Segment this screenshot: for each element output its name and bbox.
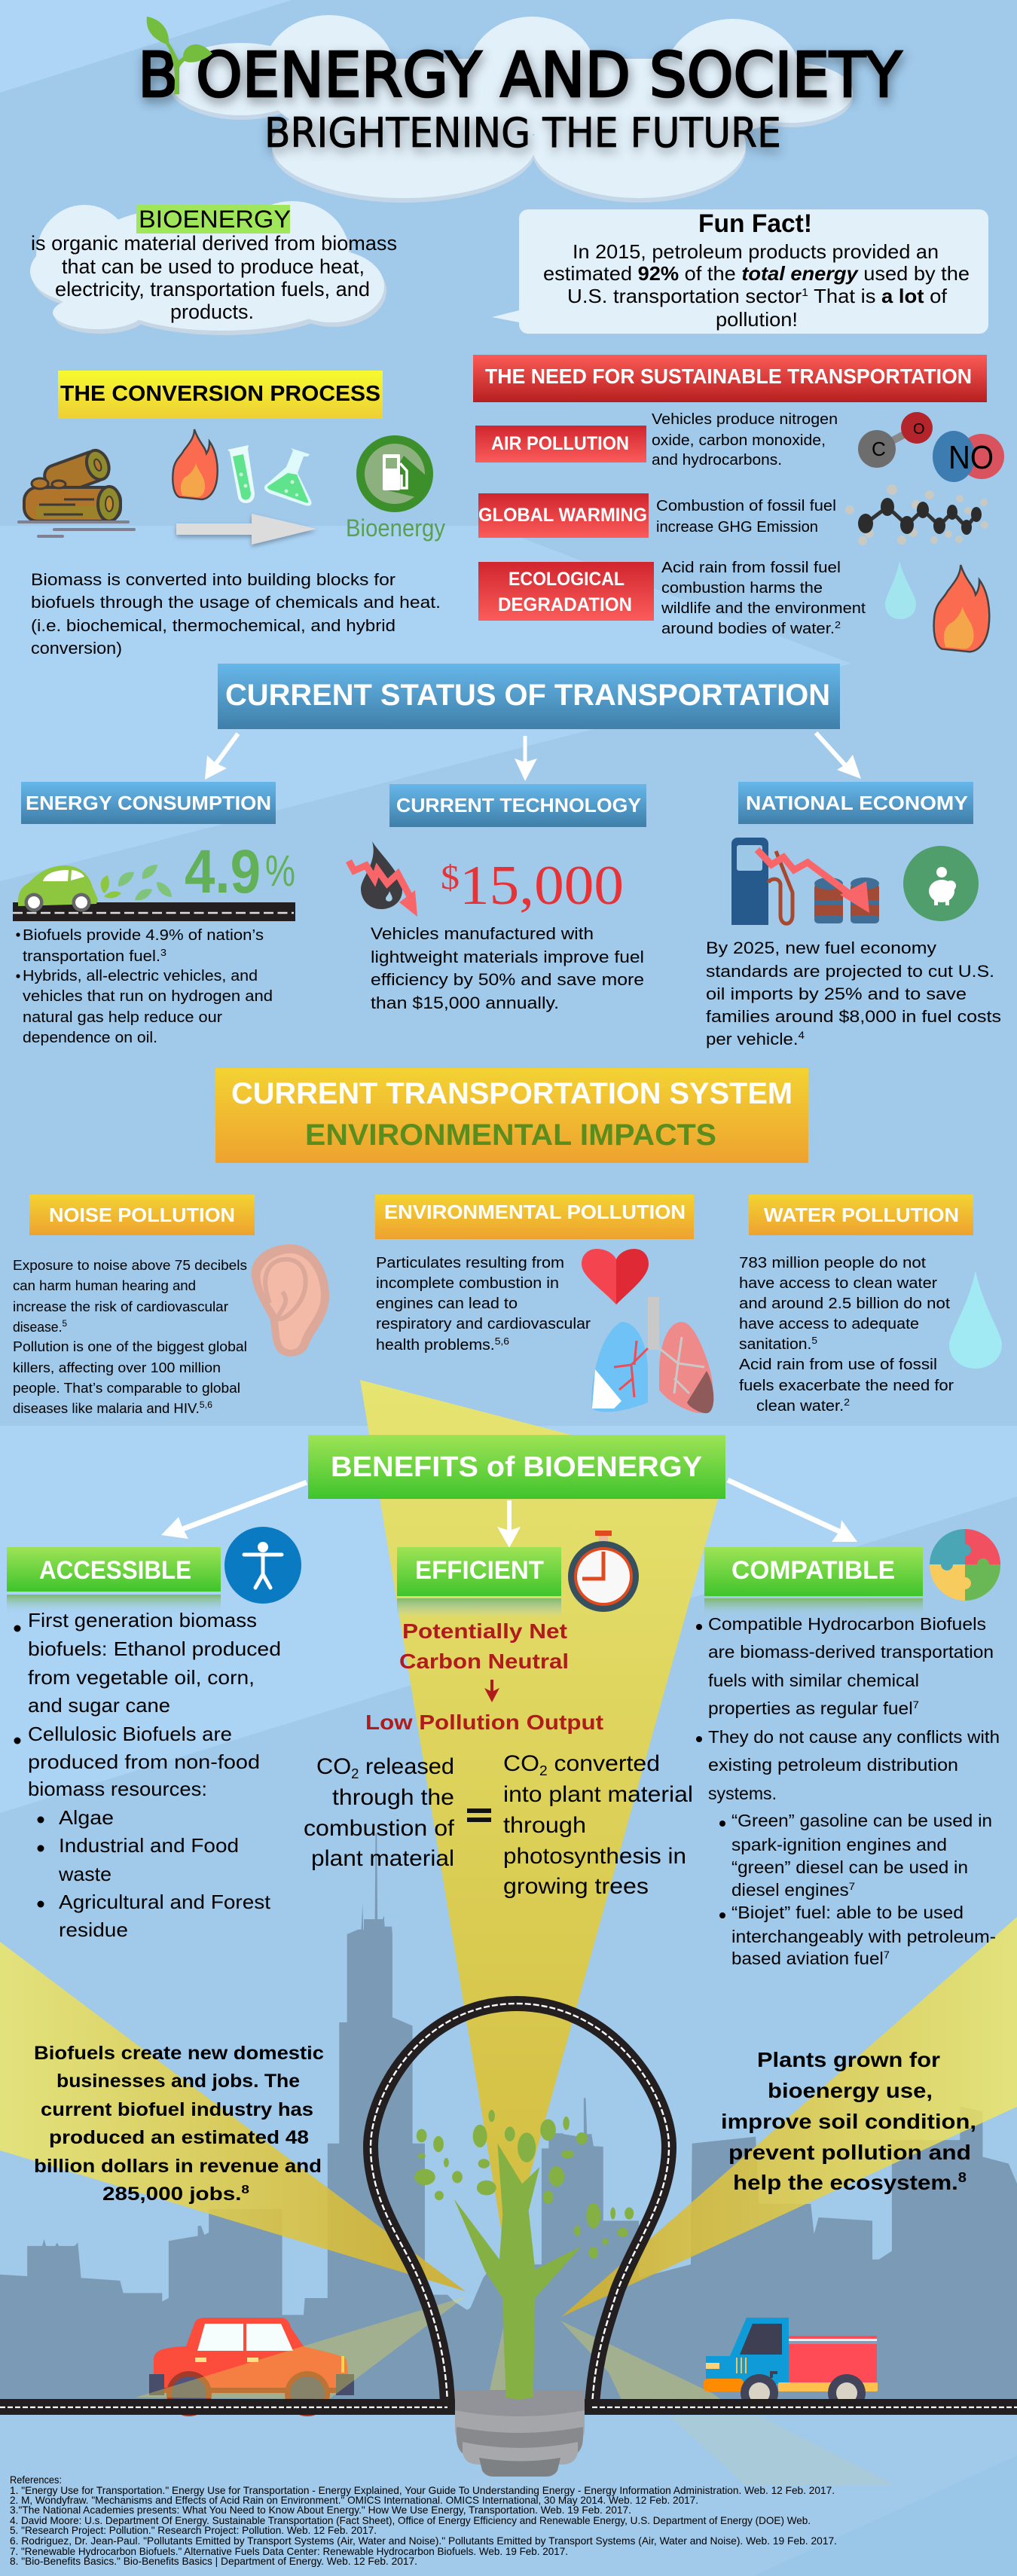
- icon: stopwatch: [568, 1531, 639, 1612]
- label: ecological degradation: DEGRADATION: [498, 594, 632, 615]
- description: 783 million people do not: [739, 1255, 926, 1271]
- icon: red car: [149, 2318, 354, 2416]
- panel: current status of transportation: [13, 664, 1001, 1048]
- description: incomplete combustion in: [376, 1275, 559, 1292]
- definition text: that can be used to produce heat,: [62, 255, 365, 278]
- CO2 converted text: 2: [539, 1763, 548, 1778]
- compatibility list: existing petroleum distribution: [708, 1755, 958, 1775]
- heading: CURRENT STATUS OF TRANSPORTATION: [225, 679, 830, 712]
- ecological degradation text: Acid rain from fossil fuel: [661, 560, 841, 576]
- benefits list: Industrial and Food: [59, 1834, 239, 1857]
- ecological degradation text: wildlife and the environment: [661, 600, 866, 617]
- references: 6. Rodriguez, Dr. Jean-Paul. "Pollutants Emitted by Transport Systems (Air, Water and Noise)." Pollutants Emitted by Transport Systems (Air, Water and Noise). Web. 19 Feb. 2017.: [10, 2535, 837, 2547]
- compatibility list: Compatible Hydrocarbon Biofuels: [708, 1614, 986, 1634]
- description: sanitation.: [739, 1336, 808, 1353]
- text: biofuels create jobs: businesses and jobs. The: [56, 2071, 300, 2092]
- description: oil imports by 25% and to save: [706, 984, 967, 1003]
- description: [371, 924, 644, 1012]
- heading: COMPATIBLE: [731, 1556, 895, 1585]
- heading: NATIONAL ECONOMY: [746, 792, 968, 814]
- conversion description: conversion): [31, 639, 122, 658]
- compatibility list: 7: [884, 1949, 890, 1961]
- text: plants grown for bioenergy: prevent pollution and: [728, 2141, 971, 2164]
- icon: road: [13, 902, 295, 921]
- compatibility list: 7: [849, 1880, 855, 1892]
- definition text: [31, 232, 397, 323]
- CO2 converted text: CO: [503, 1751, 537, 1776]
- icon: CO and NO molecules: NO: [948, 439, 994, 476]
- icon: puzzle: [930, 1529, 1000, 1601]
- bullet text: Biofuels provide 4.9% of nation’s: [23, 927, 264, 944]
- heading: ENERGY CONSUMPTION: [26, 792, 271, 814]
- panel: fun fact: [492, 209, 988, 334]
- column: efficient: [304, 1531, 693, 1899]
- air pollution text: and hydrocarbons.: [652, 452, 782, 469]
- description: [13, 1258, 247, 1416]
- text: biofuels create jobs: produced an estimated 48: [49, 2127, 309, 2148]
- description: lightweight materials improve fuel: [371, 948, 644, 966]
- text: plants grown for bioenergy: Plants grown for: [757, 2048, 940, 2071]
- heading: THE CONVERSION PROCESS: [60, 382, 380, 406]
- fun fact text: That is: [808, 285, 881, 307]
- stat: 4.9%: %: [265, 847, 295, 896]
- carbon neutral text: Potentially Net: [402, 1619, 567, 1643]
- ecological degradation text: around bodies of water.: [661, 621, 818, 637]
- text: biofuels create jobs: 285,000 jobs.: [102, 2184, 220, 2205]
- description: disease.: [13, 1320, 63, 1335]
- arrow: conversion: [176, 514, 316, 545]
- compatibility list: based aviation fuel: [731, 1949, 876, 1968]
- heading: WATER POLLUTION: [764, 1204, 959, 1226]
- bulb-shaped road: [371, 2004, 669, 2405]
- label: air pollution: AIR POLLUTION: [491, 433, 629, 454]
- fun fact text: 1: [802, 286, 808, 299]
- panel: benefits of bioenergy: [7, 1435, 1000, 1968]
- text: biofuels create jobs: [34, 2043, 324, 2205]
- heading: [704, 1547, 923, 1617]
- icon: test tube: [228, 445, 255, 503]
- label: global warming: [478, 493, 649, 538]
- compatibility list: fuels with similar chemical: [708, 1671, 919, 1690]
- CO2 released text: CO: [316, 1754, 350, 1779]
- heading: [473, 355, 987, 402]
- heading: [749, 1195, 973, 1235]
- bullet text: [16, 927, 273, 1046]
- CO2 released text: 2: [351, 1766, 359, 1781]
- references: 7. "Renewable Hydrocarbon Biofuels." Alternative Fuels Data Center: Renewable Hydrocarbon Biofuels. Web. 19 Feb. 2017.: [10, 2545, 568, 2557]
- light beam: lower headlights: [136, 2297, 722, 2400]
- description: [706, 939, 1001, 1048]
- references: 4. David Moore: U.s. Department Of Energy. Sustainable Transportation (Fact Sheet), Office of Energy Efficiency and Renewable Energy, U.S. Department of Energy (DOE) Web.: [10, 2514, 811, 2526]
- compatibility list: They do not cause any conflicts with: [708, 1727, 1000, 1747]
- title: [138, 17, 902, 157]
- text: biofuels create jobs: Biofuels create new domestic: [34, 2043, 324, 2064]
- description: [739, 1255, 954, 1415]
- conversion description: [31, 570, 441, 658]
- icon: ear: [252, 1244, 329, 1357]
- global warming text: increase GHG Emission: [656, 519, 818, 536]
- column: noise pollution: [13, 1195, 329, 1416]
- icon: flask: [264, 448, 311, 505]
- bullet text: 3: [160, 947, 166, 958]
- equals sign: [467, 1808, 491, 1822]
- description: [376, 1255, 591, 1354]
- compatibility list: diesel engines: [731, 1880, 842, 1900]
- stat: 4.9%: 4.9: [185, 838, 261, 906]
- benefits list: and sugar cane: [28, 1694, 170, 1717]
- compatibility list: “green” diesel can be used in: [731, 1857, 968, 1877]
- arrow: to accessible: [161, 1482, 307, 1539]
- description: people. That’s comparable to global: [13, 1381, 240, 1396]
- heading: EFFICIENT: [415, 1556, 544, 1585]
- definition text: products.: [170, 301, 254, 323]
- heading: CURRENT TRANSPORTATION SYSTEM: [231, 1077, 793, 1110]
- icon: logs: [17, 447, 136, 538]
- description: have access to adequate: [739, 1316, 919, 1332]
- CO2 converted text: into plant material: [503, 1782, 693, 1807]
- title cloud: [168, 15, 853, 203]
- heading: [218, 664, 840, 729]
- description: engines can lead to: [376, 1296, 518, 1312]
- heading label: BIOENERGY: [139, 206, 291, 233]
- light beams from the bulb: [0, 1380, 1017, 2317]
- text: plants grown for bioenergy: improve soil condition,: [721, 2110, 976, 2133]
- references: [10, 2474, 837, 2567]
- bioenergy label: Bioenergy: [346, 514, 445, 542]
- CO2 converted text: through: [503, 1813, 586, 1838]
- definition text: electricity, transportation fuels, and: [55, 278, 370, 301]
- ecological degradation text: combustion harms the: [661, 580, 823, 597]
- fun fact text: a lot of: [881, 285, 945, 307]
- description: diseases like malaria and HIV.: [13, 1401, 194, 1416]
- arrow: to efficient: [497, 1500, 521, 1548]
- heading: [21, 782, 276, 824]
- icon: sprout: [147, 17, 212, 94]
- CO2 released text: plant material: [311, 1846, 454, 1871]
- description: killers, affecting over 100 million: [13, 1360, 221, 1375]
- skyline: [0, 1833, 1017, 2402]
- description: have access to clean water: [739, 1275, 937, 1292]
- icon: water drop: [885, 561, 916, 619]
- horizontal road: [0, 2399, 1017, 2415]
- description: 4: [799, 1029, 805, 1041]
- bullet text: transportation fuel.: [23, 948, 148, 965]
- heading: THE NEED FOR SUSTAINABLE TRANSPORTATION: [485, 365, 972, 388]
- text: plants grown for bioenergy: help the ecosystem.: [733, 2171, 935, 2194]
- CO2 released text: combustion of: [304, 1816, 455, 1841]
- references: 3."The National Academies presents: What You Need to Know About Energy." How We Use Energy, Transportation. Web. 19 Feb. 2017.: [10, 2504, 631, 2516]
- stat: $15,000: 15,000: [460, 855, 624, 917]
- CO2 converted text: growing trees: [503, 1874, 649, 1899]
- icon: delivery truck: [704, 2318, 878, 2412]
- description: 5: [62, 1318, 67, 1329]
- air pollution text: oxide, carbon monoxide,: [652, 432, 826, 449]
- column: national economy: [706, 782, 1001, 1048]
- references: 1. "Energy Use for Transportation." Energy Use for Transportation - Energy Explained, Your Guide To Understanding Energy - Energy Information Administration. Web. 12 Feb. 2017.: [10, 2484, 835, 2496]
- benefits list: from vegetable oil, corn,: [28, 1666, 255, 1689]
- icon: fuel pump and barrels: [731, 838, 879, 925]
- benefits list: First generation biomass: [28, 1609, 257, 1631]
- compatibility list: systems.: [708, 1784, 777, 1803]
- description: increase the risk of cardiovascular: [13, 1299, 228, 1314]
- fun fact text: pollution!: [716, 308, 798, 331]
- description: efficiency by 50% and save more: [371, 970, 644, 989]
- fun fact text: [543, 240, 970, 331]
- CO2 converted text: [503, 1751, 693, 1899]
- description: 2: [844, 1396, 850, 1408]
- conversion description: Biomass is converted into building blocks for: [31, 570, 396, 589]
- references: 8. "Bio-Benefits Basics." Bio-Benefits Basics | Department of Energy. Web. 12 Feb. 2017.: [10, 2555, 417, 2567]
- compatibility list: are biomass-derived transportation: [708, 1642, 994, 1662]
- heading: [397, 1547, 561, 1617]
- description: can harm human hearing and: [13, 1278, 196, 1293]
- icon: bioenergy pump badge: [356, 435, 433, 512]
- heading: [215, 1068, 808, 1163]
- CO2 converted text: photosynthesis in: [503, 1844, 686, 1869]
- label: ecological degradation: [478, 562, 654, 621]
- arrow: to energy consumption: [205, 734, 238, 780]
- icon: lungs: [591, 1297, 713, 1413]
- CO2 converted text: converted: [548, 1751, 660, 1776]
- heading: ENVIRONMENTAL IMPACTS: [305, 1119, 716, 1152]
- CO2 released text: through the: [332, 1785, 454, 1810]
- heading: [58, 371, 383, 419]
- panel: the conversion process: [17, 371, 445, 658]
- description: than $15,000 annually.: [371, 993, 559, 1012]
- arrow: to current technology: [515, 736, 537, 781]
- stat: $15,000: $: [441, 858, 460, 896]
- heading: [7, 1547, 221, 1613]
- benefits list: biofuels: Ethanol produced: [28, 1637, 281, 1660]
- fun fact text: In 2015, petroleum products provided an: [573, 240, 939, 263]
- arrow: to national economy: [816, 733, 861, 779]
- carbon neutral text: [365, 1619, 603, 1734]
- description: Acid rain from use of fossil: [739, 1357, 937, 1373]
- description: health problems.: [376, 1337, 487, 1354]
- light beam: below the road: [473, 2416, 896, 2531]
- text: biofuels create jobs: billion dollars in revenue and: [34, 2156, 322, 2177]
- plant inside bulb: [414, 2110, 634, 2400]
- conversion description: (i.e. biochemical, thermochemical, and hybrid: [31, 616, 396, 635]
- description: fuels exacerbate the need for: [739, 1378, 954, 1394]
- benefits list: produced from non-food: [28, 1750, 260, 1773]
- compatibility list: [696, 1614, 1000, 1968]
- panel: bioenergy definition: [30, 201, 397, 335]
- fun fact text: estimated 92% of the total energy used by the: [543, 262, 970, 285]
- heading: BENEFITS of BIOENERGY: [331, 1451, 702, 1483]
- description: 5,6: [200, 1399, 212, 1410]
- bullet text: Hybrids, all-electric vehicles, and: [23, 968, 258, 984]
- heading: ENVIRONMENTAL POLLUTION: [384, 1201, 686, 1223]
- benefits list: residue: [59, 1918, 128, 1941]
- carbon neutral text: Low Pollution Output: [365, 1711, 603, 1734]
- column: energy consumption: [13, 782, 295, 1046]
- description: standards are projected to cut U.S.: [706, 962, 994, 981]
- speech bubble: [492, 209, 988, 334]
- heading: [308, 1435, 725, 1499]
- benefits list: biomass resources:: [28, 1778, 207, 1800]
- description: 5,6: [495, 1335, 509, 1347]
- column: water pollution: [739, 1195, 1002, 1415]
- bullet text: vehicles that run on hydrogen and: [23, 988, 273, 1005]
- description: respiratory and cardiovascular: [376, 1316, 591, 1332]
- main title: BIOENERGY AND SOCIETY: [138, 40, 902, 111]
- compatibility list: properties as regular fuel: [708, 1699, 899, 1718]
- fun fact text: U.S. transportation sector: [567, 285, 789, 307]
- panel: environmental impacts: [13, 1068, 1002, 1416]
- global warming text: Combustion of fossil fuel: [656, 498, 836, 514]
- heading: CURRENT TECHNOLOGY: [396, 794, 641, 816]
- icon: green car: [18, 865, 98, 911]
- benefits list: Agricultural and Forest: [59, 1891, 271, 1913]
- definition text: is organic material derived from biomass: [31, 232, 397, 255]
- label: air pollution: [475, 426, 646, 462]
- conversion description: biofuels through the usage of chemicals and heat.: [31, 593, 441, 612]
- description: 5: [811, 1335, 817, 1346]
- references: 5. "Research Project: Pollution." Research Project: Pollution. Web. 12 Feb. 2017.: [10, 2524, 377, 2536]
- text: biofuels create jobs: current biofuel industry has: [41, 2099, 313, 2120]
- heading: [29, 1195, 255, 1235]
- icon: accessibility figure: [224, 1527, 301, 1604]
- heading: [375, 1195, 694, 1239]
- bullet text: natural gas help reduce our: [23, 1009, 222, 1026]
- CO2 released text: [304, 1754, 455, 1871]
- compatibility list: spark-ignition engines and: [731, 1835, 947, 1854]
- icon: CO and NO molecules: C: [872, 438, 886, 460]
- icon: leaves: [101, 865, 172, 900]
- text: plants grown for bioenergy: 8: [958, 2170, 967, 2185]
- description: per vehicle.: [706, 1030, 791, 1048]
- ecological degradation text: [661, 560, 866, 637]
- description: families around $8,000 in fuel costs: [706, 1007, 1001, 1026]
- air pollution text: Vehicles produce nitrogen: [652, 411, 838, 428]
- arrow: to compatible: [728, 1480, 857, 1542]
- ecological degradation text: 2: [835, 619, 841, 630]
- text: plants grown for bioenergy: bioenergy use,: [768, 2079, 933, 2102]
- compatibility list: interchangeably with petroleum-: [731, 1927, 996, 1946]
- carbon neutral text: Carbon Neutral: [399, 1650, 569, 1673]
- icon: heart: [582, 1249, 649, 1305]
- references: 2. M, Wondyfraw. "Mechanisms and Effects of Acid Rain on Environment." OMICS International. OMICS International, 30 May 2014. Web. 12 Feb. 2017.: [10, 2494, 698, 2506]
- icon: water drop: [949, 1271, 1002, 1369]
- description: and around 2.5 billion do not: [739, 1296, 950, 1312]
- column: environmental pollution: [375, 1195, 713, 1413]
- label: global warming: GLOBAL WARMING: [478, 505, 647, 526]
- benefits list: waste: [58, 1863, 111, 1885]
- benefits list: [14, 1609, 281, 1941]
- global warming text: [656, 498, 836, 536]
- benefits list: Algae: [59, 1806, 114, 1829]
- benefits list: Cellulosic Biofuels are: [28, 1723, 232, 1745]
- icon: oil drop with falling arrow: [349, 841, 417, 917]
- fun fact heading: Fun Fact!: [698, 209, 812, 238]
- panel: the need for sustainable transportation: [473, 355, 1004, 652]
- description: Particulates resulting from: [376, 1255, 564, 1271]
- compatibility list: “Green” gasoline can be used in: [731, 1811, 992, 1830]
- subtitle: BRIGHTENING THE FUTURE: [264, 109, 781, 157]
- heading: [389, 784, 646, 827]
- compatibility list: 7: [913, 1699, 919, 1711]
- bulb base: [455, 2390, 585, 2477]
- column: current technology: [349, 784, 646, 1012]
- heading: [738, 782, 973, 824]
- column: compatible: [696, 1529, 1000, 1968]
- description: Pollution is one of the biggest global: [13, 1339, 247, 1354]
- icon: flame: [173, 429, 218, 499]
- description: Vehicles manufactured with: [371, 924, 594, 943]
- icon: piggy bank badge: [903, 846, 979, 921]
- references: References:: [10, 2474, 62, 2486]
- definition cloud: [30, 201, 386, 335]
- icon: flame large: [934, 565, 989, 652]
- description: clean water.: [756, 1398, 837, 1415]
- icon: CO and NO molecules: O: [913, 421, 925, 438]
- icon: hydrocarbon molecule: [845, 484, 988, 545]
- arrow: carbon neutral to low pollution: [484, 1680, 499, 1702]
- label: ecological degradation: ECOLOGICAL: [508, 569, 625, 590]
- description: By 2025, new fuel economy: [706, 939, 936, 957]
- description: Exposure to noise above 75 decibels: [13, 1258, 247, 1273]
- text: biofuels create jobs: 8: [241, 2184, 249, 2196]
- column: accessible: [7, 1527, 301, 1941]
- CO2 released text: released: [359, 1754, 454, 1779]
- bullet text: dependence on oil.: [23, 1030, 157, 1046]
- icon: CO and NO molecules: [858, 412, 1004, 482]
- air pollution text: [652, 411, 838, 469]
- text: plants grown for bioenergy: [721, 2048, 976, 2194]
- heading: NOISE POLLUTION: [49, 1204, 235, 1226]
- heading: ACCESSIBLE: [39, 1556, 191, 1585]
- compatibility list: “Biojet” fuel: able to be used: [731, 1903, 964, 1922]
